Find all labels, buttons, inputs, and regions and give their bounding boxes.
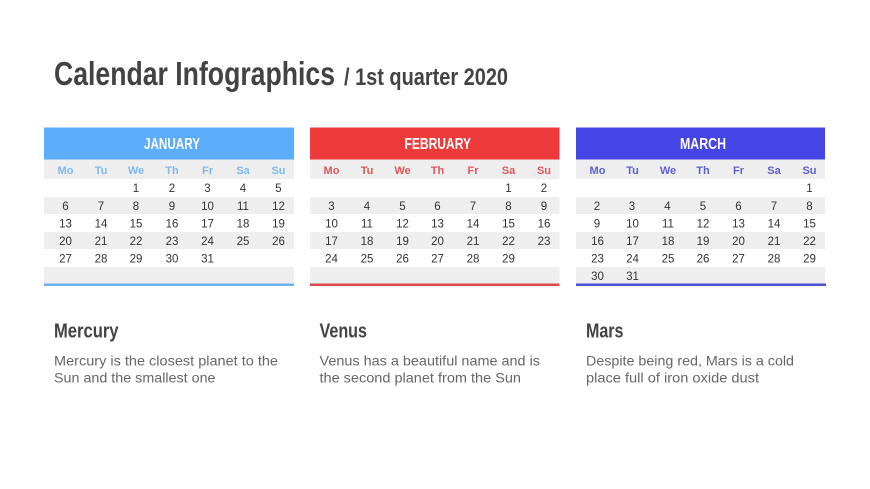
panel: March calendar: 24: [626, 254, 639, 266]
panel: January calendar: 14: [95, 218, 108, 230]
panel: February calendar: 21: [467, 236, 479, 248]
panel: February calendar: 22: [502, 236, 515, 248]
panel: February calendar: We: [394, 165, 411, 177]
text block: Mars: Mars: [586, 320, 624, 342]
panel: February calendar: 27: [431, 254, 444, 266]
panel: January calendar: 9: [169, 201, 175, 213]
panel: February calendar: Sa: [502, 165, 516, 177]
panel: February calendar: Mo: [324, 165, 340, 177]
panel: January calendar: 1: [133, 183, 139, 195]
panel: January calendar: 6: [62, 201, 69, 213]
panel: February calendar: 12: [396, 218, 409, 230]
panel: January calendar: 10: [201, 201, 214, 213]
panel: February calendar: 4: [364, 201, 371, 213]
panel: March calendar: 4: [664, 201, 671, 213]
panel: February calendar: 8: [505, 201, 512, 213]
panel: January calendar: Mo: [58, 165, 74, 177]
panel: March calendar: 10: [626, 218, 639, 230]
panel: February calendar: 28: [467, 254, 479, 266]
panel: January calendar: 29: [130, 254, 142, 266]
panel: February calendar: [310, 128, 560, 286]
panel: February calendar: 7: [470, 201, 476, 213]
panel: January calendar: 23: [166, 236, 178, 248]
panel: January calendar: Th: [165, 165, 179, 177]
text block: Mars: [586, 320, 794, 386]
panel: March calendar: 8: [806, 201, 813, 213]
panel: March calendar: Sa: [767, 165, 782, 177]
panel: February calendar: 18: [361, 236, 373, 248]
panel: February calendar: 1: [505, 183, 512, 195]
panel: February calendar: 9: [541, 201, 547, 213]
text block: Venus: [320, 320, 540, 386]
panel: February calendar: 19: [396, 236, 409, 248]
panel: January calendar: 3: [204, 183, 211, 195]
text block: Mercury: Mercury is the closest planet to the: [54, 352, 278, 368]
panel: January calendar: Fr: [202, 165, 214, 177]
panel: March calendar: 3: [629, 201, 635, 213]
panel: January calendar: 4: [240, 183, 247, 195]
panel: January calendar: 15: [130, 218, 142, 230]
panel: March calendar: 22: [803, 236, 816, 248]
panel: January calendar: 16: [166, 218, 178, 230]
text block: Venus: Venus has a beautiful name and is: [320, 352, 540, 368]
panel: February calendar: 3: [328, 201, 335, 213]
panel: February calendar: 15: [502, 218, 515, 230]
panel: January calendar: 8: [133, 201, 139, 213]
panel: February calendar: 25: [361, 254, 373, 266]
panel: February calendar: 2: [541, 183, 547, 195]
text block: Venus: Venus: [320, 320, 367, 342]
panel: February calendar: 29: [502, 254, 515, 266]
panel: January calendar: 17: [201, 218, 214, 230]
panel: February calendar: 10: [325, 218, 338, 230]
panel: March calendar: We: [660, 165, 676, 177]
panel: February calendar: 14: [467, 218, 480, 230]
panel: January calendar: [44, 128, 294, 286]
panel: January calendar: 19: [272, 218, 285, 230]
panel: February calendar: 13: [431, 218, 444, 230]
panel: January calendar: Su: [271, 165, 286, 177]
panel: March calendar: Su: [802, 165, 817, 177]
panel: March calendar: 20: [732, 236, 745, 248]
title: / 1st quarter 2020: [344, 64, 508, 91]
panel: February calendar: Th: [431, 165, 444, 177]
panel: March calendar: 13: [732, 218, 745, 230]
panel: February calendar: 6: [434, 201, 441, 213]
panel: January calendar: 22: [130, 236, 142, 248]
panel: January calendar: Tu: [95, 165, 107, 177]
panel: February calendar: Tu: [361, 165, 373, 177]
panel: March calendar: MARCH: [680, 136, 726, 153]
panel: March calendar: 14: [768, 218, 781, 230]
panel: January calendar: 11: [237, 201, 249, 213]
panel: March calendar: 26: [697, 254, 709, 266]
panel: March calendar: 18: [662, 236, 674, 248]
panel: March calendar: 6: [735, 201, 742, 213]
panel: January calendar: Sa: [236, 165, 251, 177]
panel: February calendar: 5: [399, 201, 406, 213]
text block: Mercury: Sun and the smallest one: [54, 370, 216, 386]
panel: January calendar: 31: [201, 254, 214, 266]
panel: March calendar: 15: [803, 218, 816, 230]
panel: January calendar: We: [128, 165, 144, 177]
panel: March calendar: 30: [591, 271, 604, 283]
panel: March calendar: 27: [732, 254, 745, 266]
panel: March calendar: Fr: [733, 165, 745, 177]
panel: March calendar: 11: [662, 218, 674, 230]
panel: January calendar: 25: [237, 236, 249, 248]
panel: January calendar: 2: [169, 183, 175, 195]
panel: March calendar: 2: [594, 201, 600, 213]
panel: March calendar: 17: [626, 236, 639, 248]
panel: March calendar: Mo: [590, 165, 606, 177]
panel: March calendar: Th: [696, 165, 710, 177]
panel: January calendar: 26: [272, 236, 285, 248]
panel: March calendar: 9: [594, 218, 600, 230]
text block: Mercury: Mercury: [54, 320, 119, 342]
text block: Venus: the second planet from the Sun: [320, 370, 521, 386]
panel: January calendar: 13: [59, 218, 72, 230]
panel: January calendar: 18: [237, 218, 249, 230]
panel: January calendar: 20: [59, 236, 72, 248]
panel: January calendar: 24: [201, 236, 214, 248]
panel: January calendar: 7: [98, 201, 104, 213]
panel: February calendar: Su: [537, 165, 551, 177]
panel: March calendar: 19: [697, 236, 709, 248]
panel: March calendar: 31: [626, 271, 639, 283]
panel: March calendar: Tu: [626, 165, 639, 177]
panel: February calendar: FEBRUARY: [404, 136, 471, 153]
panel: February calendar: 23: [538, 236, 550, 248]
panel: March calendar: 28: [768, 254, 780, 266]
panel: January calendar: 28: [95, 254, 107, 266]
panel: January calendar: 30: [166, 254, 178, 266]
panel: March calendar: 1: [806, 183, 813, 195]
panel: January calendar: JANUARY: [144, 136, 200, 153]
panel: January calendar: 12: [272, 201, 285, 213]
text block: Mars: Despite being red, Mars is a cold: [586, 352, 794, 368]
text block: Mercury: [54, 320, 278, 386]
title: Calendar Infographics: [54, 55, 335, 92]
panel: February calendar: 26: [396, 254, 409, 266]
panel: January calendar: 21: [95, 236, 107, 248]
panel: February calendar: Fr: [468, 165, 479, 177]
panel: March calendar: 5: [700, 201, 706, 213]
panel: February calendar: 11: [361, 218, 373, 230]
text block: Mars: place full of iron oxide dust: [586, 370, 759, 386]
panel: January calendar: 5: [275, 183, 282, 195]
panel: March calendar: [576, 128, 826, 286]
panel: February calendar: 16: [538, 218, 550, 230]
panel: February calendar: 20: [431, 236, 444, 248]
panel: March calendar: 7: [771, 201, 777, 213]
panel: February calendar: 17: [325, 236, 338, 248]
panel: March calendar: 23: [591, 254, 604, 266]
panel: March calendar: 12: [697, 218, 709, 230]
panel: February calendar: 24: [325, 254, 338, 266]
panel: March calendar: 21: [768, 236, 780, 248]
panel: March calendar: 25: [662, 254, 674, 266]
panel: January calendar: 27: [59, 254, 72, 266]
panel: March calendar: 16: [591, 236, 604, 248]
panel: March calendar: 29: [803, 254, 816, 266]
